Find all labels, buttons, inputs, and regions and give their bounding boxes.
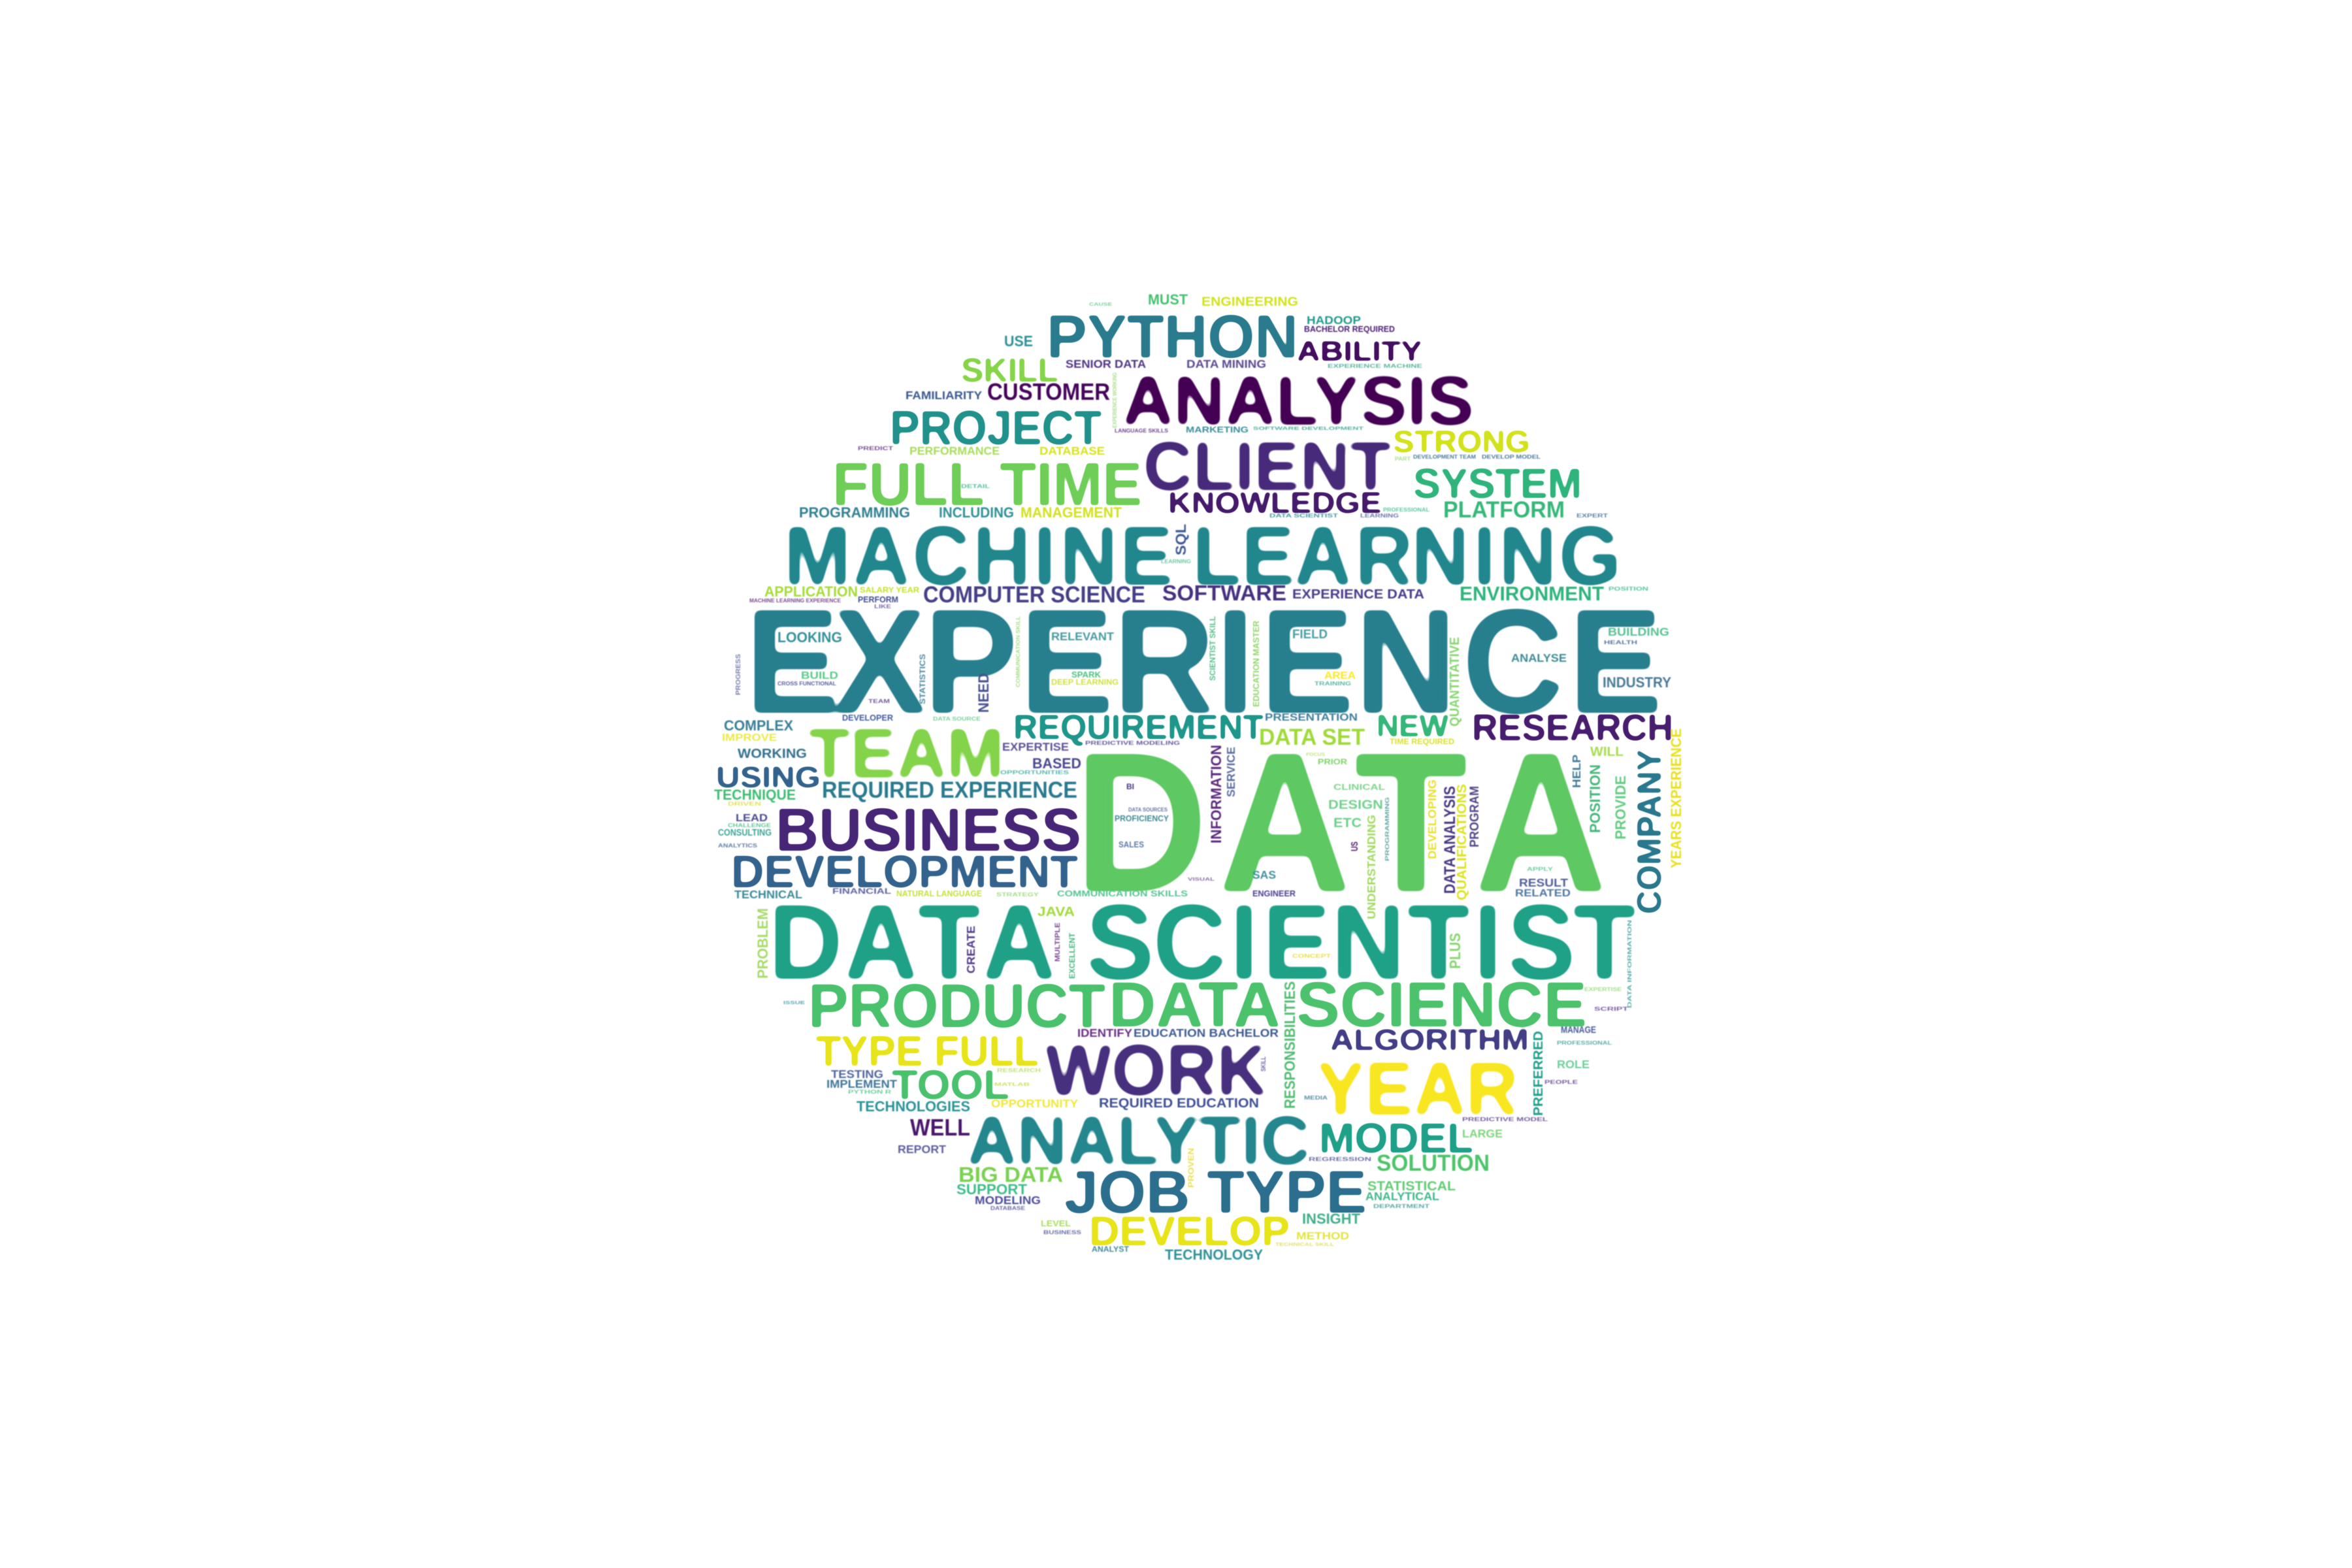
word: FIELD: FIELD [1292,628,1328,642]
word: METHOD: METHOD [1296,1231,1349,1242]
word: ETC: ETC [1333,816,1362,830]
word: RESEARCH small: RESEARCH [997,1067,1041,1073]
word: CLIENT: CLIENT [1143,428,1392,505]
word: MODELING: MODELING [975,1194,1041,1207]
word: DEVELOP: DEVELOP [1089,1209,1290,1254]
word: STRONG: STRONG [1393,424,1530,459]
word: PERFORMANCE: PERFORMANCE [909,444,1000,457]
word: TRAINING: TRAINING [1315,680,1351,687]
word: PLUS: PLUS [1446,933,1463,969]
word: QUANTITATIVE: QUANTITATIVE [1448,637,1462,727]
word: DEVELOP MODEL: DEVELOP MODEL [1482,453,1541,460]
word: WILL: WILL [1590,745,1624,759]
word: ISSUE: ISSUE [783,1000,805,1005]
word: SKILL: SKILL [961,351,1058,389]
word: PROGRAMMING: PROGRAMMING [799,504,910,521]
word: JAVA: JAVA [1037,905,1075,919]
word: POSITION: POSITION [1587,764,1603,833]
word: SUPPORT: SUPPORT [956,1181,1028,1198]
word: BUSINESS: BUSINESS [776,796,1081,864]
word: DEEP LEARNING: DEEP LEARNING [1051,678,1119,687]
word: DEVELOPMENT: DEVELOPMENT [731,846,1078,897]
word: ENVIRONMENT: ENVIRONMENT [1460,582,1604,605]
word: ANALYSE: ANALYSE [1511,651,1567,664]
word: US: US [1350,841,1360,851]
word: IMPLEMENT: IMPLEMENT [826,1077,897,1090]
word: USING: USING [716,760,821,794]
word: LEARNING: LEARNING [1192,509,1622,603]
word: YEAR: YEAR [1316,1047,1518,1131]
word: DEVELOPING: DEVELOPING [1426,779,1439,859]
word: BUILD: BUILD [801,670,838,681]
word: UNDERSTANDING: UNDERSTANDING [1365,815,1378,919]
word: USE: USE [1004,333,1033,350]
word: REQUIRED EDUCATION: REQUIRED EDUCATION [1099,1096,1259,1111]
word: FULL TIME: FULL TIME [832,450,1142,518]
word: EXPERIENCE MACHINE: EXPERIENCE MACHINE [1328,363,1422,369]
word: REQUIRED EXPERIENCE: REQUIRED EXPERIENCE [822,777,1077,803]
word: ALGORITHM: ALGORITHM [1330,1023,1529,1056]
medium words [714,291,1684,1263]
word: STATISTICS: STATISTICS [919,654,927,704]
word: SOFTWARE: SOFTWARE [1162,581,1286,605]
word: PRIOR: PRIOR [1318,758,1348,766]
word: ANALYTIC: ANALYTIC [967,1102,1311,1179]
word: SALES: SALES [1119,840,1144,849]
word: BI: BI [1126,783,1134,791]
word: ENGINEER: ENGINEER [1252,889,1296,898]
word: MARKETING: MARKETING [1186,425,1249,434]
word: EXPERIENCE: EXPERIENCE [745,579,1663,745]
word: LEVEL: LEVEL [1041,1218,1071,1228]
word: EDUCATION MASTER: EDUCATION MASTER [1251,620,1261,707]
word: SYSTEM: SYSTEM [1413,460,1582,507]
word: RESULT: RESULT [1519,876,1568,889]
word: FOCUS: FOCUS [1306,751,1325,757]
word: SAS: SAS [1252,868,1276,881]
word: REGRESSION: REGRESSION [1309,1156,1371,1162]
word: BASED: BASED [1032,755,1081,772]
word: EXPERTISE: EXPERTISE [1002,740,1069,753]
word: MANAGEMENT: MANAGEMENT [1021,504,1122,521]
word: DATA SOURCES: DATA SOURCES [1128,806,1168,813]
largest words [745,361,1663,1179]
word: COMMUNICATION SKILLS: COMMUNICATION SKILLS [1057,889,1188,898]
word: TESTING: TESTING [831,1068,883,1081]
word: ENGINEERING: ENGINEERING [1201,295,1298,309]
word: ROLE: ROLE [1557,1058,1590,1071]
word: TOOLS: EXPERTISE [1584,986,1622,992]
word: SCIENTIST SKILL: SCIENTIST SKILL [1209,616,1217,681]
word: NEW: NEW [1377,708,1449,743]
word: DEPARTMENT: DEPARTMENT [1373,1203,1430,1209]
word: TIME REQUIRED: TIME REQUIRED [1390,738,1454,746]
word: COMPUTER SCIENCE: COMPUTER SCIENCE [923,582,1145,608]
word: RELEVANT: RELEVANT [1051,630,1114,643]
word: SENIOR DATA: SENIOR DATA [1066,357,1146,370]
word: LEARNING small: LEARNING [1360,512,1399,519]
word: MULTIPLE: MULTIPLE [1054,923,1062,962]
word: PLATFORM: PLATFORM [1443,497,1565,523]
word: BACHELOR REQUIRED: BACHELOR REQUIRED [1304,324,1395,334]
word: BIG DATA: BIG DATA [958,1163,1063,1186]
word: CHALLENGE: CHALLENGE [728,822,771,828]
word: STRATEGY: STRATEGY [996,891,1039,898]
word: PROVIDE: PROVIDE [1612,776,1629,840]
word: DATABASE: DATABASE [1039,444,1105,457]
word: DATA SCIENTIST small: DATA SCIENTIST [1269,512,1339,519]
word: TECHNOLOGIES: TECHNOLOGIES [857,1098,970,1115]
word: BUILDING: BUILDING [1608,625,1669,638]
word: ANALYST: ANALYST [1092,1245,1129,1254]
word: INDUSTRY: INDUSTRY [1603,674,1671,691]
word: DRIVEN: DRIVEN [728,800,761,807]
word: HELP: HELP [1570,755,1583,788]
word: JOB TYPE: JOB TYPE [1064,1159,1367,1226]
word: DATA ANALYSIS: DATA ANALYSIS [1441,786,1459,894]
word: PREDICTIVE MODEL: PREDICTIVE MODEL [1462,1116,1548,1122]
word: PROGRAM: PROGRAM [1468,786,1482,847]
word: TEAM small: TEAM [868,698,890,704]
word: TEAM: TEAM [808,713,1004,792]
word: CREATE: CREATE [964,926,977,973]
word: PYTHON: PYTHON [1047,302,1298,370]
word: INSIGHT: INSIGHT [1302,1211,1361,1227]
word: PEOPLE: PEOPLE [1544,1079,1578,1085]
word: RESPONSIBILITIES: RESPONSIBILITIES [1281,981,1298,1109]
word: DETAIL: DETAIL [961,483,990,489]
word: REPORT: REPORT [898,1143,946,1156]
word: KNOWLEDGE: KNOWLEDGE [1168,486,1382,519]
word: BUSINESS small: BUSINESS [1043,1229,1081,1235]
word: MUST: MUST [1148,291,1188,308]
word: CONCEPT: CONCEPT [1292,953,1331,959]
word: LOOKING: LOOKING [777,629,842,645]
word: TECHNICAL SKILL: TECHNICAL SKILL [1275,1241,1335,1247]
word: PYTHON R: PYTHON R [848,1088,892,1095]
word: SCRIPT: SCRIPT [1594,1005,1629,1012]
word: MEDIA: MEDIA [1304,1094,1328,1101]
word: ANALYTICS: ANALYTICS [718,842,757,849]
word: FINANCIAL: FINANCIAL [832,887,891,896]
word: RESEARCH: RESEARCH [1472,707,1673,749]
word: IMPROVE: IMPROVE [722,732,777,743]
word: HEALTH: HEALTH [1604,639,1637,645]
word: IDENTIFY: IDENTIFY [1077,1026,1132,1039]
word: LIKE: LIKE [874,603,891,610]
word: VISUAL: VISUAL [1188,876,1215,882]
word: TYPE FULL: TYPE FULL [816,1027,1039,1075]
word: FAMILIARITY: FAMILIARITY [906,389,982,402]
word: WORK: WORK [1045,1030,1267,1111]
word: SOFTWARE DEVELOPMENT: SOFTWARE DEVELOPMENT [1253,425,1364,431]
word: SERVICE: SERVICE [1224,747,1237,797]
word: CROSS FUNCTIONAL: CROSS FUNCTIONAL [777,680,837,687]
tiny words [718,301,1648,1247]
word: YEARS EXPERIENCE: YEARS EXPERIENCE [1668,728,1684,868]
word: PROBLEM: PROBLEM [755,908,771,979]
word: ABILITY: ABILITY [1297,336,1422,367]
word: MATLAB: MATLAB [994,1081,1030,1087]
word: SKILL small: SKILL [1260,1056,1267,1071]
word: ANALYSIS: ANALYSIS [1122,361,1474,440]
word: INCLUDING: INCLUDING [939,504,1014,521]
word: CONSULTING: CONSULTING [718,828,772,838]
word: COMPANY: COMPANY [1631,749,1669,914]
word: TECHNOLOGY: TECHNOLOGY [1165,1247,1263,1263]
large words [716,302,1673,1254]
word: DATA: DATA [1074,711,1608,934]
word: QUALIFICATIONS: QUALIFICATIONS [1455,784,1469,900]
word: LEARNING green: LEARNING [1161,558,1191,564]
word: PROFESSIONAL teal: PROFESSIONAL [1557,1039,1612,1046]
word: CUSTOMER: CUSTOMER [987,378,1110,405]
word: OPPORTUNITIES: OPPORTUNITIES [1000,769,1069,776]
word: EDUCATION BACHELOR: EDUCATION BACHELOR [1134,1026,1279,1039]
word: DEVELOPMENT TEAM: DEVELOPMENT TEAM [1413,453,1476,460]
word: EXPERT: EXPERT [1576,512,1609,519]
word: SPARK: SPARK [1071,670,1102,679]
word: DATA SCIENCE: DATA SCIENCE [1109,969,1587,1040]
word: COMMUNICATION SKILL: COMMUNICATION SKILL [1015,615,1021,687]
word: APPLICATION: APPLICATION [764,583,858,600]
word: MACHINE: MACHINE [784,509,1173,603]
word: LEAD: LEAD [736,813,768,824]
word: MACHINE LEARNING EXPERIENCE: MACHINE LEARNING EXPERIENCE [749,597,841,604]
word: LANGUAGE SKILLS: LANGUAGE SKILLS [1115,427,1168,434]
word: TECHNIQUE: TECHNIQUE [714,787,796,803]
word: EXPERIENCE DATA: EXPERIENCE DATA [1292,587,1424,602]
word: DEVELOPER: DEVELOPER [842,713,894,723]
word: PROGRESS: PROGRESS [735,654,742,695]
word: RELATED: RELATED [1515,888,1571,899]
word: SOLUTION: SOLUTION [1377,1151,1490,1176]
word: PREDICT: PREDICT [858,446,893,451]
word: MANAGE: MANAGE [1561,1025,1596,1036]
word: DESIGN: DESIGN [1328,798,1383,812]
word: PART: PART [1395,455,1411,462]
word: ANALYTICAL: ANALYTICAL [1365,1190,1439,1203]
word: PROVEN vertical: PROVEN [1187,1148,1196,1188]
word: STATISTICAL: STATISTICAL [1367,1179,1456,1194]
word: DATABASE small: DATABASE [990,1205,1025,1211]
word: PREDICTIVE MODELING: PREDICTIVE MODELING [1085,740,1180,746]
word: PROGRAMMING LANGUAGE: PROGRAMMING [1384,797,1390,861]
word: TOOL: TOOL [892,1062,1009,1108]
word: SQL: SQL [1173,524,1189,555]
word: DATA SCIENTIST: DATA SCIENTIST [768,882,1636,1002]
word: PRESENTATION: PRESENTATION [1265,712,1358,723]
word: WORKING: WORKING [738,747,807,761]
word: INFORMATION: INFORMATION [1208,745,1224,843]
word: CAUSE: CAUSE [1089,301,1112,307]
word: DATA SET: DATA SET [1259,725,1365,750]
word: DATA MINING: DATA MINING [1186,357,1266,370]
word: OPPORTUNITY: OPPORTUNITY [991,1097,1078,1110]
word: CLINICAL: CLINICAL [1333,782,1385,792]
word: LARGE: LARGE [1462,1127,1503,1140]
word: PROFICIENCY: PROFICIENCY [1115,813,1169,823]
word: REQUIREMENT: REQUIREMENT [1013,708,1264,747]
word: SALARY YEAR: SALARY YEAR [860,586,920,595]
word: EXPERIENCE WORKING: EXPERIENCE WORKING [1111,372,1118,428]
word: MODEL: MODEL [1319,1115,1473,1162]
word: TECHNICAL: TECHNICAL [734,888,802,901]
word: WELL: WELL [910,1114,970,1141]
word: HADOOP: HADOOP [1307,314,1361,327]
word: APPLY: APPLY [1527,866,1553,872]
word: NATURAL LANGUAGE: NATURAL LANGUAGE [896,889,982,898]
word: STRUCTURED DATA: DATA INFORMATION [1626,920,1633,1008]
word: NEED: NEED [975,673,992,713]
word: PREFERRED: PREFERRED [1531,1031,1546,1116]
word: PRODUCT: PRODUCT [808,972,1105,1041]
word: POSITION small: POSITION [1609,585,1648,592]
word: PERFORM: PERFORM [858,595,898,604]
word: PROFESSIONAL: PROFESSIONAL [1383,506,1430,513]
word: EXCELLENT: EXCELLENT [1068,933,1077,979]
word: AREA: AREA [1324,670,1356,681]
word: PROJECT: PROJECT [890,402,1102,455]
word: COMPLEX: COMPLEX [724,717,793,734]
word: DATA SOURCE: DATA SOURCE [933,715,981,722]
